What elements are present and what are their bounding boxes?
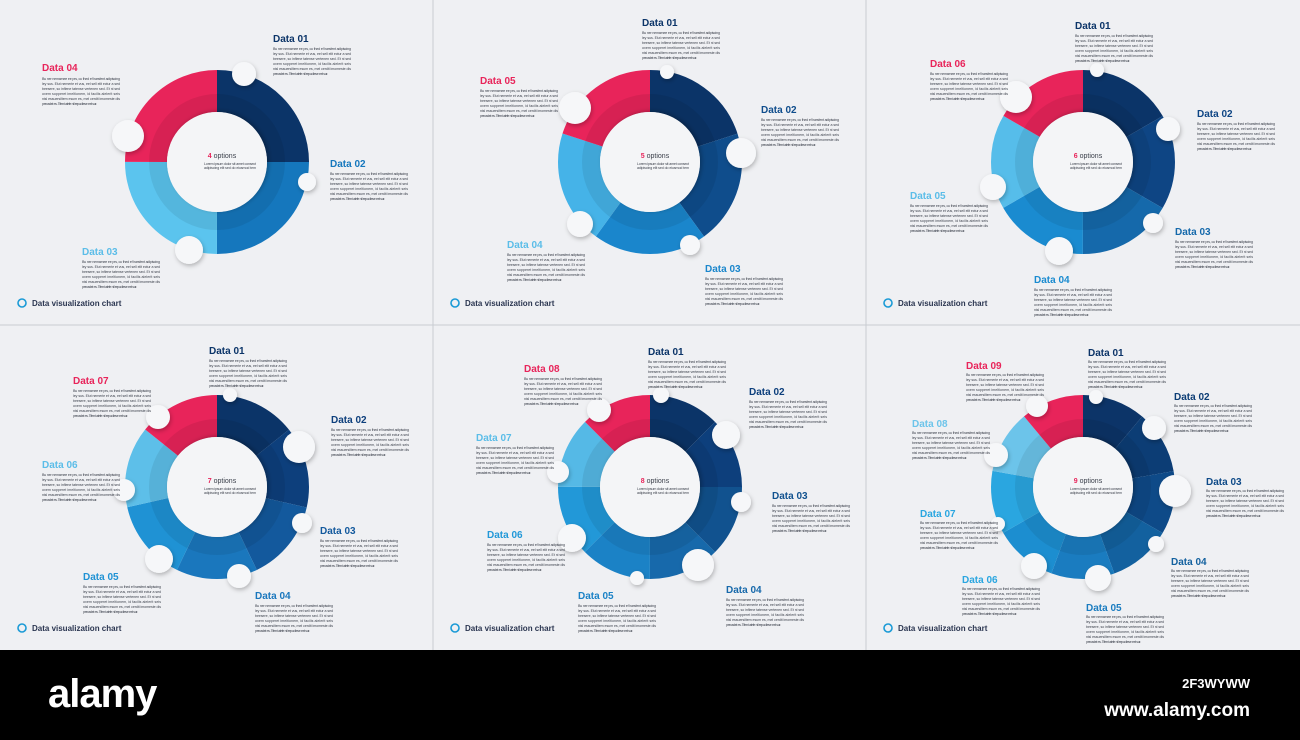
center label 5 [637, 153, 689, 170]
center label 5: 5 options [641, 153, 670, 160]
donut chart 6 [1012, 91, 1154, 233]
label Data 01 [642, 18, 720, 60]
label Data 03 [320, 526, 398, 568]
footer: Data visualization chart [898, 624, 988, 633]
donut chart 4 [146, 91, 288, 233]
center label 7: adipiscing elit sed do eiusmod tem [204, 491, 256, 495]
footer: Data visualization chart [898, 299, 988, 308]
center label 9: Lorem ipsum dolor sit amet consect [1070, 487, 1122, 491]
label Data 05 [1086, 603, 1164, 644]
label Data 03 [1175, 227, 1253, 269]
label Data 06: Data 06 [962, 575, 998, 586]
label Data 02 [761, 105, 839, 147]
label Data 02 [331, 415, 409, 457]
label Data 08 [912, 419, 990, 460]
center label 4 [204, 153, 256, 170]
label Data 08 [524, 364, 602, 406]
panel: 6 options [884, 21, 1275, 317]
center label 5: adipiscing elit sed do eiusmod tem [637, 166, 689, 170]
label Data 01: Data 01 [642, 18, 678, 29]
label Data 01: Data 01 [1075, 21, 1111, 32]
label Data 08: Data 08 [524, 364, 560, 375]
bubbles 9 [984, 390, 1191, 591]
label Data 03: Data 03 [1206, 477, 1242, 488]
panel: 9 options [884, 348, 1284, 644]
label Data 06 [42, 460, 120, 502]
label Data 02 [1197, 109, 1275, 151]
label Data 03 [772, 491, 850, 533]
center label 9: 9 options [1074, 478, 1103, 485]
label Data 04 [1034, 275, 1112, 317]
label Data 05: Data 05 [578, 591, 614, 602]
label Data 06 [930, 59, 1008, 101]
center label 7 [204, 478, 256, 495]
label Data 02 [749, 387, 827, 429]
label Data 06 [487, 530, 565, 572]
label Data 05 [480, 76, 558, 118]
label Data 01: Data 01 [1088, 348, 1124, 359]
bubbles 6 [980, 63, 1180, 265]
label Data 09: Data 09 [966, 361, 1002, 372]
label Data 03: Data 03 [82, 247, 118, 258]
alamy logo: alamy [48, 672, 158, 716]
label Data 02: Data 02 [1197, 109, 1233, 120]
label Data 03: Data 03 [320, 526, 356, 537]
label Data 02: Data 02 [331, 415, 367, 426]
label Data 03 [1206, 477, 1284, 518]
center label 5: Lorem ipsum dolor sit amet consect [637, 162, 689, 166]
label Data 06: Data 06 [930, 59, 966, 70]
label Data 07 [73, 376, 151, 418]
donut chart 8 [579, 416, 721, 558]
center label 9 [1070, 478, 1122, 495]
donut chart 7 [146, 416, 288, 558]
label Data 05: Data 05 [910, 191, 946, 202]
label Data 04: Data 04 [507, 240, 543, 251]
label Data 03: Data 03 [705, 264, 741, 275]
center label 8: Lorem ipsum dolor sit amet consect [637, 487, 689, 491]
center label 6 [1070, 153, 1122, 170]
label Data 08: Data 08 [912, 419, 948, 430]
label Data 03 [82, 247, 160, 289]
label Data 05: Data 05 [480, 76, 516, 87]
label Data 04: Data 04 [726, 585, 762, 596]
label Data 04: Data 04 [1171, 557, 1207, 568]
label Data 04: Data 04 [255, 591, 291, 602]
donut chart 5 [579, 91, 721, 233]
panel: 4 options [18, 34, 408, 308]
center label 4: adipiscing elit sed do eiusmod tem [204, 166, 256, 170]
label Data 02 [330, 159, 408, 201]
label Data 01 [273, 34, 351, 76]
panel: 8 options [451, 347, 850, 633]
label Data 01: Data 01 [209, 346, 245, 357]
label Data 02: Data 02 [761, 105, 797, 116]
center label 9: adipiscing elit sed do eiusmod tem [1070, 491, 1122, 495]
label Data 04 [726, 585, 804, 627]
image id: 2F3WYWW [1182, 676, 1251, 691]
label Data 05 [910, 191, 988, 233]
bottom bar [0, 650, 1300, 740]
center label 6: 6 options [1074, 153, 1103, 160]
label Data 07 [920, 509, 998, 550]
center label 8: 8 options [641, 478, 670, 485]
panel: 5 options [451, 18, 839, 308]
label Data 04 [255, 591, 333, 633]
label Data 05: Data 05 [1086, 603, 1122, 614]
center label 6: Lorem ipsum dolor sit amet consect [1070, 162, 1122, 166]
label Data 06 [962, 575, 1040, 616]
label Data 01 [209, 346, 287, 388]
label Data 07: Data 07 [73, 376, 109, 387]
label Data 07: Data 07 [476, 433, 512, 444]
label Data 05 [578, 591, 656, 633]
label Data 06: Data 06 [42, 460, 78, 471]
label Data 02: Data 02 [749, 387, 785, 398]
center label 6: adipiscing elit sed do eiusmod tem [1070, 166, 1122, 170]
label Data 04 [507, 240, 585, 282]
bubbles 8 [547, 387, 751, 585]
label Data 03 [705, 264, 783, 306]
label Data 06: Data 06 [487, 530, 523, 541]
label Data 05 [83, 572, 161, 614]
label Data 01 [1088, 348, 1166, 389]
label Data 03: Data 03 [772, 491, 808, 502]
footer: Data visualization chart [465, 299, 555, 308]
label Data 07 [476, 433, 554, 475]
label Data 01 [648, 347, 726, 389]
label Data 04: Data 04 [1034, 275, 1070, 286]
label Data 01: Data 01 [648, 347, 684, 358]
center label 8: adipiscing elit sed do eiusmod tem [637, 491, 689, 495]
footer: Data visualization chart [32, 624, 122, 633]
label Data 04 [42, 63, 120, 106]
center label 4: Lorem ipsum dolor sit amet consect [204, 162, 256, 166]
label Data 01: Data 01 [273, 34, 309, 45]
label Data 05: Data 05 [83, 572, 119, 583]
label Data 04: Data 04 [42, 63, 78, 74]
bubbles 7 [113, 388, 315, 588]
label Data 02 [1174, 392, 1252, 433]
label Data 09 [966, 361, 1044, 402]
footer: Data visualization chart [465, 624, 555, 633]
center label 8 [637, 478, 689, 495]
bubbles 4 [112, 62, 316, 264]
label Data 07: Data 07 [920, 509, 956, 520]
center label 7: 7 options [208, 478, 237, 485]
center label 7: Lorem ipsum dolor sit amet consect [204, 487, 256, 491]
label Data 03: Data 03 [1175, 227, 1211, 238]
label Data 02: Data 02 [330, 159, 366, 170]
label Data 04 [1171, 557, 1249, 598]
bubbles 5 [559, 65, 756, 255]
panel: 7 options [18, 346, 409, 633]
donut chart 9 [1012, 416, 1154, 558]
label Data 01 [1075, 21, 1153, 63]
footer: Data visualization chart [32, 299, 122, 308]
center label 4: 4 options [208, 153, 237, 160]
website: www.alamy.com [1103, 700, 1250, 721]
label Data 02: Data 02 [1174, 392, 1210, 403]
